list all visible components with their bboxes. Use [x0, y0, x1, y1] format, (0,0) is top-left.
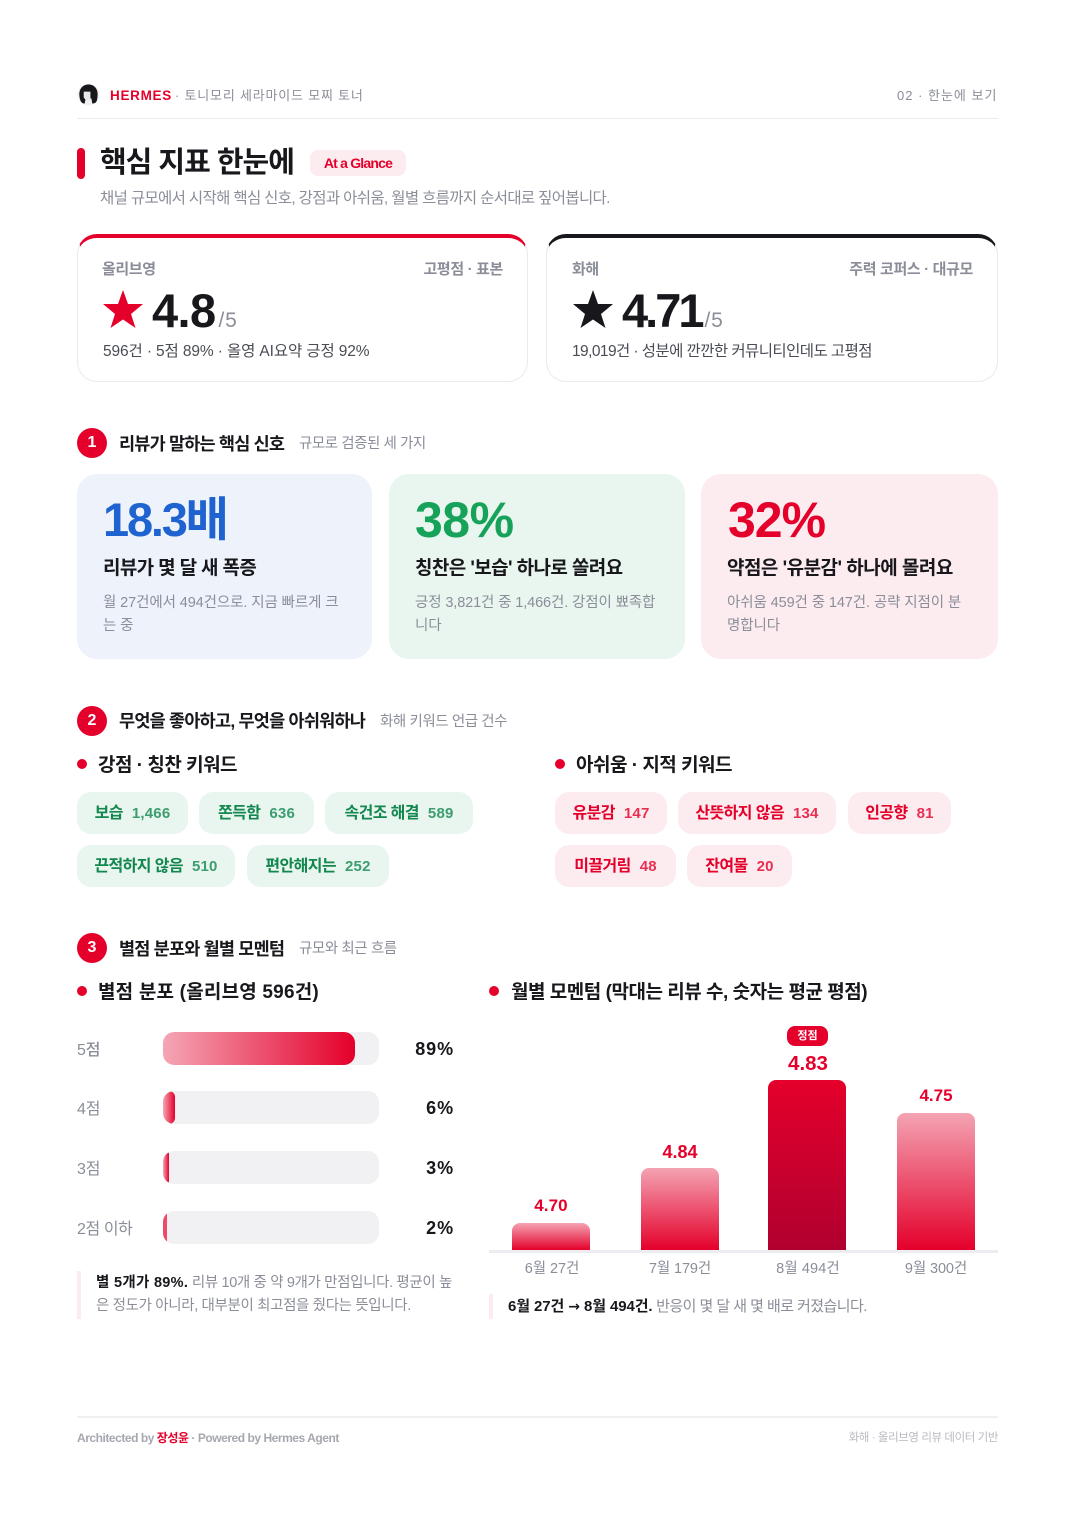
stat heading: 칭찬은 '보습' 하나로 쏠려요 — [415, 558, 623, 579]
keyword: 미끌거림 48 — [574, 858, 657, 875]
stat heading: 약점은 '유분감' 하나에 몰려요 — [727, 558, 953, 579]
channel tag: 고평점 · 표본 — [423, 261, 503, 278]
strengths heading: 강점 · 칭찬 키워드 — [98, 755, 237, 776]
stat description — [727, 594, 961, 634]
bar 7월 — [641, 1168, 719, 1250]
keyword: 속건조 해결 589 — [344, 805, 454, 822]
keyword: 잔여물 20 — [705, 858, 774, 875]
channel label: 올리브영 — [102, 261, 156, 278]
stat description: 니다 — [415, 618, 441, 634]
keyword — [247, 845, 389, 887]
momentum heading: 월별 모멘텀 (막대는 리뷰 수, 숫자는 평균 평점) — [511, 982, 867, 1003]
section 1 heading: 리뷰가 말하는 핵심 신호 — [119, 434, 284, 454]
percentages: 89% — [415, 1039, 454, 1059]
section 2 number: 2 — [88, 712, 96, 729]
badge: At a Glance: At a Glance — [324, 155, 392, 171]
rating detail: 596건 · 5점 89% · 올영 AI요약 긍정 92% — [103, 343, 369, 360]
badge: At a Glance — [310, 150, 406, 176]
keyword — [199, 792, 314, 834]
rating distribution note: 은 정도가 아니라, 대부분이 최고점을 줬다는 뜻입니다. — [96, 1298, 411, 1314]
panel: 18.3배 — [77, 474, 372, 659]
bar 3점 — [163, 1151, 379, 1184]
keyword: 편안해지는 252 — [265, 858, 371, 875]
monthly bar chart — [489, 1026, 998, 1277]
rating distribution chart: 2점 이하 — [77, 1221, 133, 1238]
header: brand — [78, 84, 364, 106]
rating distribution note: 별 5개가 89%. 리뷰 10개 중 약 9개가 만점입니다. 평균이 높 — [96, 1275, 452, 1291]
section 2 note: 화해 키워드 언급 건수 — [380, 714, 507, 730]
section 1 number — [77, 428, 107, 458]
icon: star — [573, 290, 613, 328]
stat description: 아쉬움 459건 중 147건. 공략 지점이 분 — [727, 595, 961, 611]
panel: 화해 rating — [546, 234, 998, 382]
panel: 32% — [701, 474, 998, 659]
weaknesses keywords — [555, 792, 951, 887]
baseline — [489, 1250, 998, 1253]
keyword — [678, 792, 836, 834]
panel: 올리브영 rating — [77, 234, 528, 382]
keyword — [325, 792, 473, 834]
bar 5점 — [163, 1032, 379, 1065]
peak badge — [787, 1026, 828, 1046]
section 2 number — [77, 706, 107, 736]
bar 9월 — [897, 1113, 975, 1250]
bar 8월 — [768, 1080, 846, 1250]
rating distribution chart: 4점 — [77, 1101, 100, 1118]
bar 2점 이하 — [163, 1211, 379, 1244]
bar 6월 — [512, 1223, 590, 1250]
keyword: 산뜻하지 않음 134 — [695, 805, 819, 822]
channel tag: 주력 코퍼스 · 대규모 — [849, 261, 973, 278]
section 3 number — [77, 933, 107, 963]
keyword — [555, 792, 667, 834]
header: page marker: 02 · 한눈에 보기 — [897, 88, 997, 103]
footer source: 화해 · 올리브영 리뷰 데이터 기반 — [849, 1432, 998, 1444]
stat: 38% — [415, 492, 514, 548]
peak badge: 정점 — [797, 1030, 818, 1042]
monthly bar chart: 4.84 — [662, 1142, 698, 1162]
title: 핵심 지표 한눈에 — [100, 147, 294, 179]
keyword — [687, 845, 792, 887]
weaknesses heading: 아쉬움 · 지적 키워드 — [576, 755, 732, 776]
section 3 number: 3 — [88, 939, 96, 956]
rating value: 4.71/5 — [622, 284, 724, 337]
stat: 32% — [728, 492, 825, 548]
section 1 number: 1 — [88, 434, 96, 451]
month labels: 6월 27건 — [525, 1261, 579, 1277]
title accent bar — [77, 148, 85, 179]
panel: 38% — [389, 474, 685, 659]
stat description: 는 중 — [103, 618, 133, 634]
bar 4점 — [163, 1091, 379, 1124]
keyword — [77, 845, 235, 887]
section 2 heading: 무엇을 좋아하고, 무엇을 아쉬워하나 — [119, 711, 365, 731]
stat description — [103, 594, 339, 634]
stat description — [415, 594, 655, 634]
rating distribution chart: 3% — [426, 1158, 454, 1178]
rating value: 4.8/5 — [152, 284, 238, 337]
strengths keywords — [77, 792, 473, 887]
monthly bar chart: 8월 494건 — [776, 1261, 840, 1277]
monthly bar chart: 7월 179건 — [649, 1261, 711, 1277]
values: 4.70 — [534, 1196, 568, 1215]
channel label: 화해 — [572, 261, 599, 278]
keyword: 유분감 147 — [572, 805, 650, 822]
section 1 note: 규모로 검증된 세 가지 — [299, 436, 426, 452]
stat: 18.3배 — [103, 493, 227, 546]
icon: brand logo — [78, 84, 100, 106]
stat heading: 리뷰가 몇 달 새 폭증 — [103, 558, 256, 579]
keyword: 끈적하지 않음 510 — [94, 858, 218, 875]
keyword — [848, 792, 951, 834]
keyword: 보습 1,466 — [95, 805, 170, 822]
header: brand: · 토니모리 세라마이드 모찌 토너 — [175, 88, 364, 103]
momentum note — [489, 1294, 889, 1319]
section 3 note: 규모와 최근 흐름 — [299, 941, 397, 957]
rating distribution chart: 2% — [426, 1218, 454, 1238]
icon: star — [103, 290, 143, 328]
rating distribution chart — [77, 1032, 454, 1244]
stat description: 긍정 3,821건 중 1,466건. 강점이 뾰족합 — [415, 595, 655, 611]
rating distribution heading: 별점 분포 (올리브영 596건) — [98, 982, 319, 1003]
row labels: 5점 — [77, 1042, 100, 1059]
subtitle: 채널 규모에서 시작해 핵심 신호, 강점과 아쉬움, 월별 흐름까지 순서대로 짚어봅니다. — [100, 190, 610, 207]
rating distribution note — [77, 1271, 459, 1319]
header: brand: HERMES — [110, 88, 172, 103]
monthly bar chart: 4.83 — [788, 1052, 828, 1075]
stat description: 월 27건에서 494건으로. 지금 빠르게 크 — [103, 595, 339, 611]
keyword — [555, 845, 676, 887]
keyword — [77, 792, 188, 834]
momentum note: 6월 27건 → 8월 494건. 반응이 몇 달 새 몇 배로 커졌습니다. — [508, 1298, 867, 1315]
rating distribution chart: 3점 — [77, 1161, 100, 1178]
keyword: 인공향 81 — [865, 805, 934, 822]
rating distribution chart: 6% — [426, 1098, 454, 1118]
keyword: 쫀득함 636 — [218, 805, 295, 822]
stat description: 명합니다 — [727, 618, 780, 634]
monthly bar chart: 4.75 — [919, 1086, 953, 1105]
footer credit: Architected by 장성윤 · Powered by Hermes Agent — [77, 1431, 339, 1445]
monthly bar chart: 9월 300건 — [905, 1261, 967, 1277]
section 3 heading: 별점 분포와 월별 모멘텀 — [119, 939, 284, 959]
rating detail: 19,019건 · 성분에 깐깐한 커뮤니티인데도 고평점 — [572, 343, 872, 360]
